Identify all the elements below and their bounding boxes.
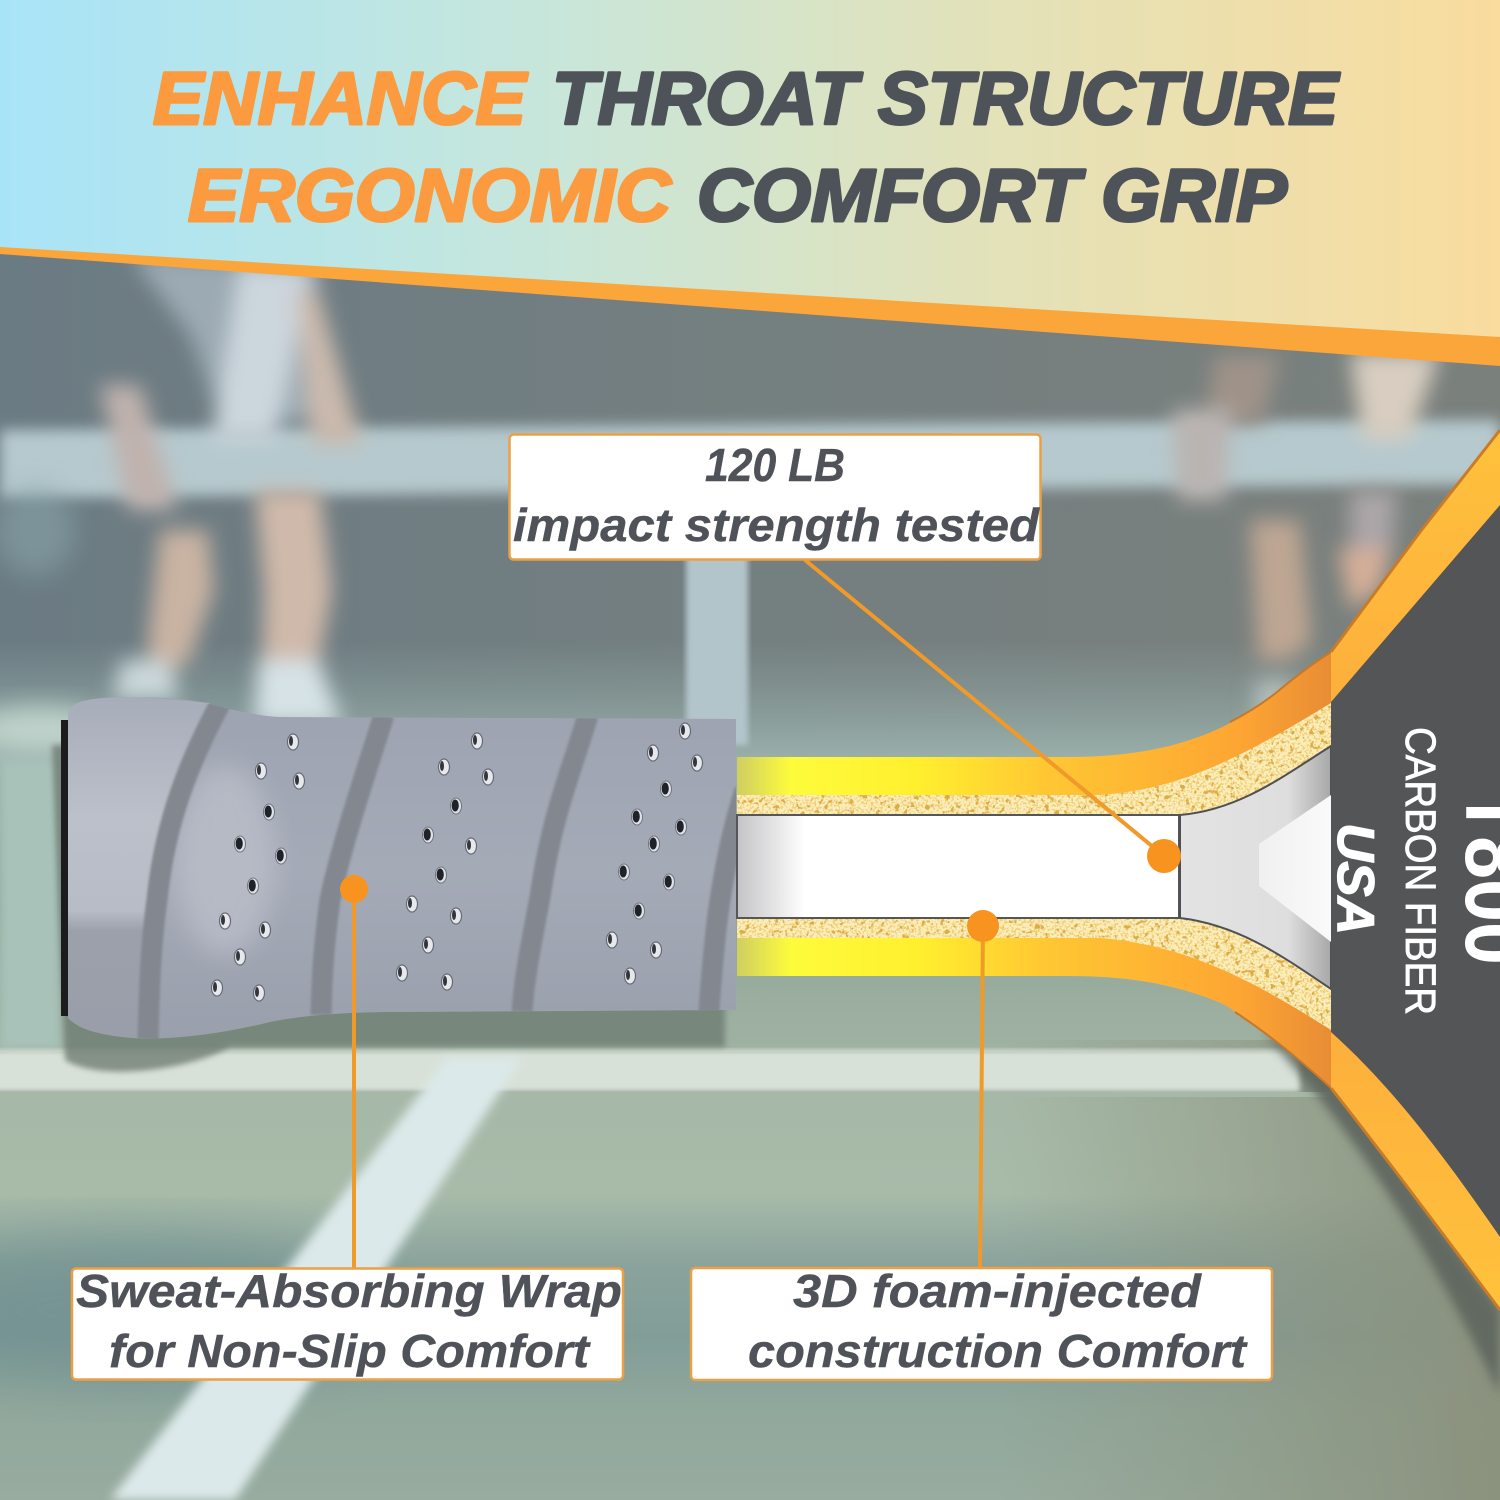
paddle throat cross-section [737,652,1331,1088]
title line 1: THROAT STRUCTURE [552,57,1341,140]
leader dot [340,875,368,903]
blurred right player [1172,352,1440,730]
leader line [980,926,983,1268]
orange paddle edge [1331,430,1500,1310]
title line 2 [188,154,1288,237]
paddle edge shading [1331,430,1500,1310]
paddle face [1326,430,1500,1310]
leader line [805,560,1164,856]
label text: 120 LB [705,439,845,491]
label text: construction Comfort [748,1325,1248,1377]
paddle drop shadow [1262,1030,1500,1395]
inner gray wedge [1180,746,1331,989]
light trapezoid [1259,795,1331,942]
blurred net post [682,560,752,747]
label text [513,439,1040,551]
grip body [68,697,736,1039]
grip handle [61,697,745,1040]
inner white channel [737,815,1179,918]
paddle label: carbon fiber: CARBON FIBER [1396,727,1444,1015]
label box [691,1268,1272,1380]
label text: 3D foam-injected [793,1265,1202,1317]
foam core [737,703,1331,1030]
callout: sweat-absorbing wrap [72,875,623,1380]
label text: for Non-Slip Comfort [109,1325,591,1377]
grip drop shadow [52,745,725,1072]
outer orange shell [737,652,1331,1088]
dark paddle face [1331,505,1500,1237]
grip left light area [68,697,210,1038]
label box [510,434,1040,560]
title line 1 [153,57,1341,140]
leader line [352,889,356,1268]
callout: foam construction [691,910,1272,1380]
title [153,57,1341,237]
label box [72,1268,623,1380]
grip wrap seams [148,700,745,1040]
paddle label: USA: USA [1326,823,1384,935]
title line 2: ERGONOMIC [188,154,673,237]
header banner [0,0,1500,366]
shell dark edges [1230,652,1331,1088]
label text: Sweat-Absorbing Wrap [76,1265,622,1317]
title line 1: ENHANCE [153,57,529,140]
grip perforations [212,723,702,1001]
leader dot [967,910,999,942]
leader dot [1147,839,1181,873]
blurred left player [100,255,362,725]
orange banner edge [0,247,1500,366]
callout: impact strength [510,434,1181,873]
court white lines [0,1048,1322,1500]
label text [748,1265,1248,1377]
label text [76,1265,622,1377]
blurred net band [0,420,1500,498]
grip end cap [61,720,68,1016]
label text: impact strength tested [513,499,1040,551]
title line 2: COMFORT GRIP [697,154,1288,237]
